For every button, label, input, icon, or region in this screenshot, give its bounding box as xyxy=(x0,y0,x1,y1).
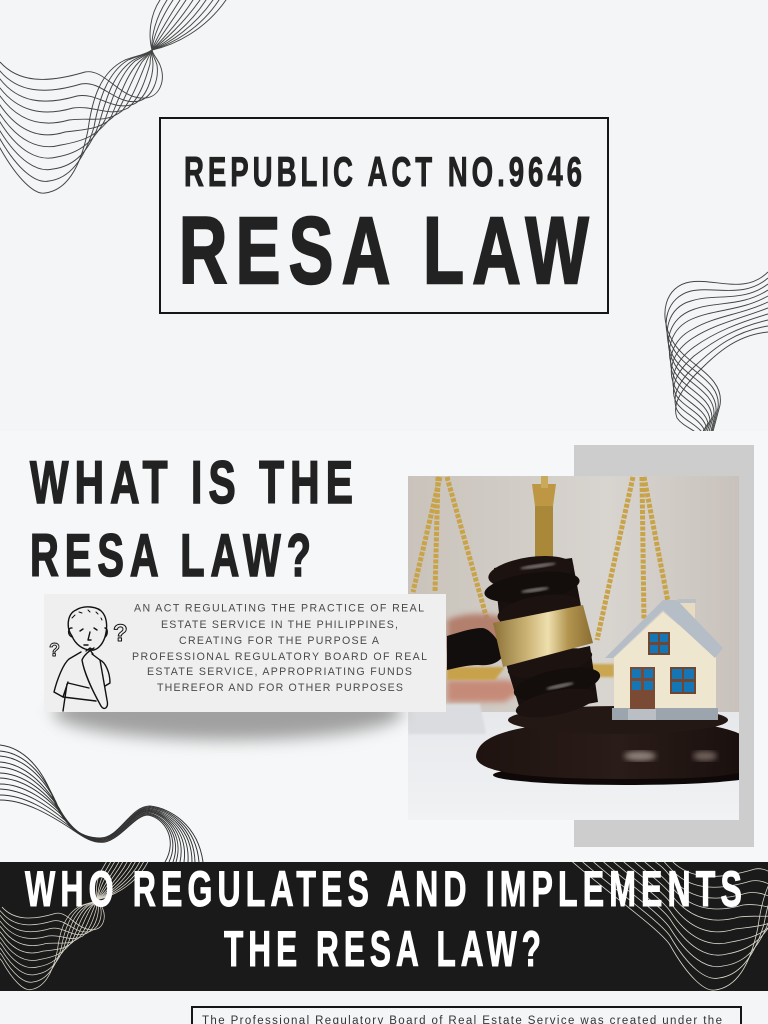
bottom box frame xyxy=(192,1007,741,1024)
house window right xyxy=(670,667,696,694)
icon: thinking person: ? xyxy=(113,620,128,647)
title frame xyxy=(160,118,608,313)
banner wave left xyxy=(0,860,149,990)
heading line one: WHAT IS THE xyxy=(30,449,359,516)
model house xyxy=(605,599,723,720)
dark banner xyxy=(0,862,768,991)
decorative wave: lower left ribbon xyxy=(0,745,203,862)
title panel xyxy=(160,118,608,313)
banner wave right xyxy=(572,862,768,991)
section background: what is the resa law xyxy=(0,431,768,862)
heading line two: RESA LAW? xyxy=(30,522,317,589)
card text: THEREFOR AND FOR OTHER PURPOSES xyxy=(157,682,403,694)
gavel head xyxy=(483,551,603,723)
card text: AN ACT REGULATING THE PRACTICE OF REAL xyxy=(134,602,424,614)
card text: ESTATE SERVICE IN THE PHILIPPINES, xyxy=(161,619,398,631)
banner background xyxy=(0,862,768,991)
scale column xyxy=(532,476,556,556)
card background xyxy=(44,594,446,712)
card text: CREATING FOR THE PURPOSE A xyxy=(179,635,380,647)
scale chains xyxy=(413,477,668,640)
definition card xyxy=(44,594,446,712)
icon: thinking person: ? xyxy=(49,640,60,660)
blurred hand xyxy=(447,614,522,702)
blurred keyboard xyxy=(408,704,486,734)
scale pans xyxy=(447,664,614,680)
card text: ESTATE SERVICE, APPROPRIATING FUNDS xyxy=(147,666,412,678)
house window top xyxy=(648,632,670,655)
photo table xyxy=(408,712,739,820)
card drop shadow xyxy=(53,684,403,740)
bottom text box xyxy=(192,1007,741,1024)
house door xyxy=(630,667,655,709)
gavel base xyxy=(476,706,760,785)
banner heading line two: THE RESA LAW? xyxy=(224,921,546,977)
decorative wave: top left xyxy=(0,0,233,193)
photo wall xyxy=(408,476,739,716)
title: resa law: RESA LAW xyxy=(179,198,597,304)
gavel handle xyxy=(447,628,503,670)
photo: gavel, scales and model house xyxy=(408,476,760,820)
decorative wave: right of title xyxy=(665,272,768,435)
icon: thinking person xyxy=(49,607,128,711)
card text xyxy=(132,602,427,694)
card text: PROFESSIONAL REGULATORY BOARD OF REAL xyxy=(132,651,427,663)
heading: what is the resa law xyxy=(30,449,359,589)
grey backing panel behind photo xyxy=(574,445,754,847)
